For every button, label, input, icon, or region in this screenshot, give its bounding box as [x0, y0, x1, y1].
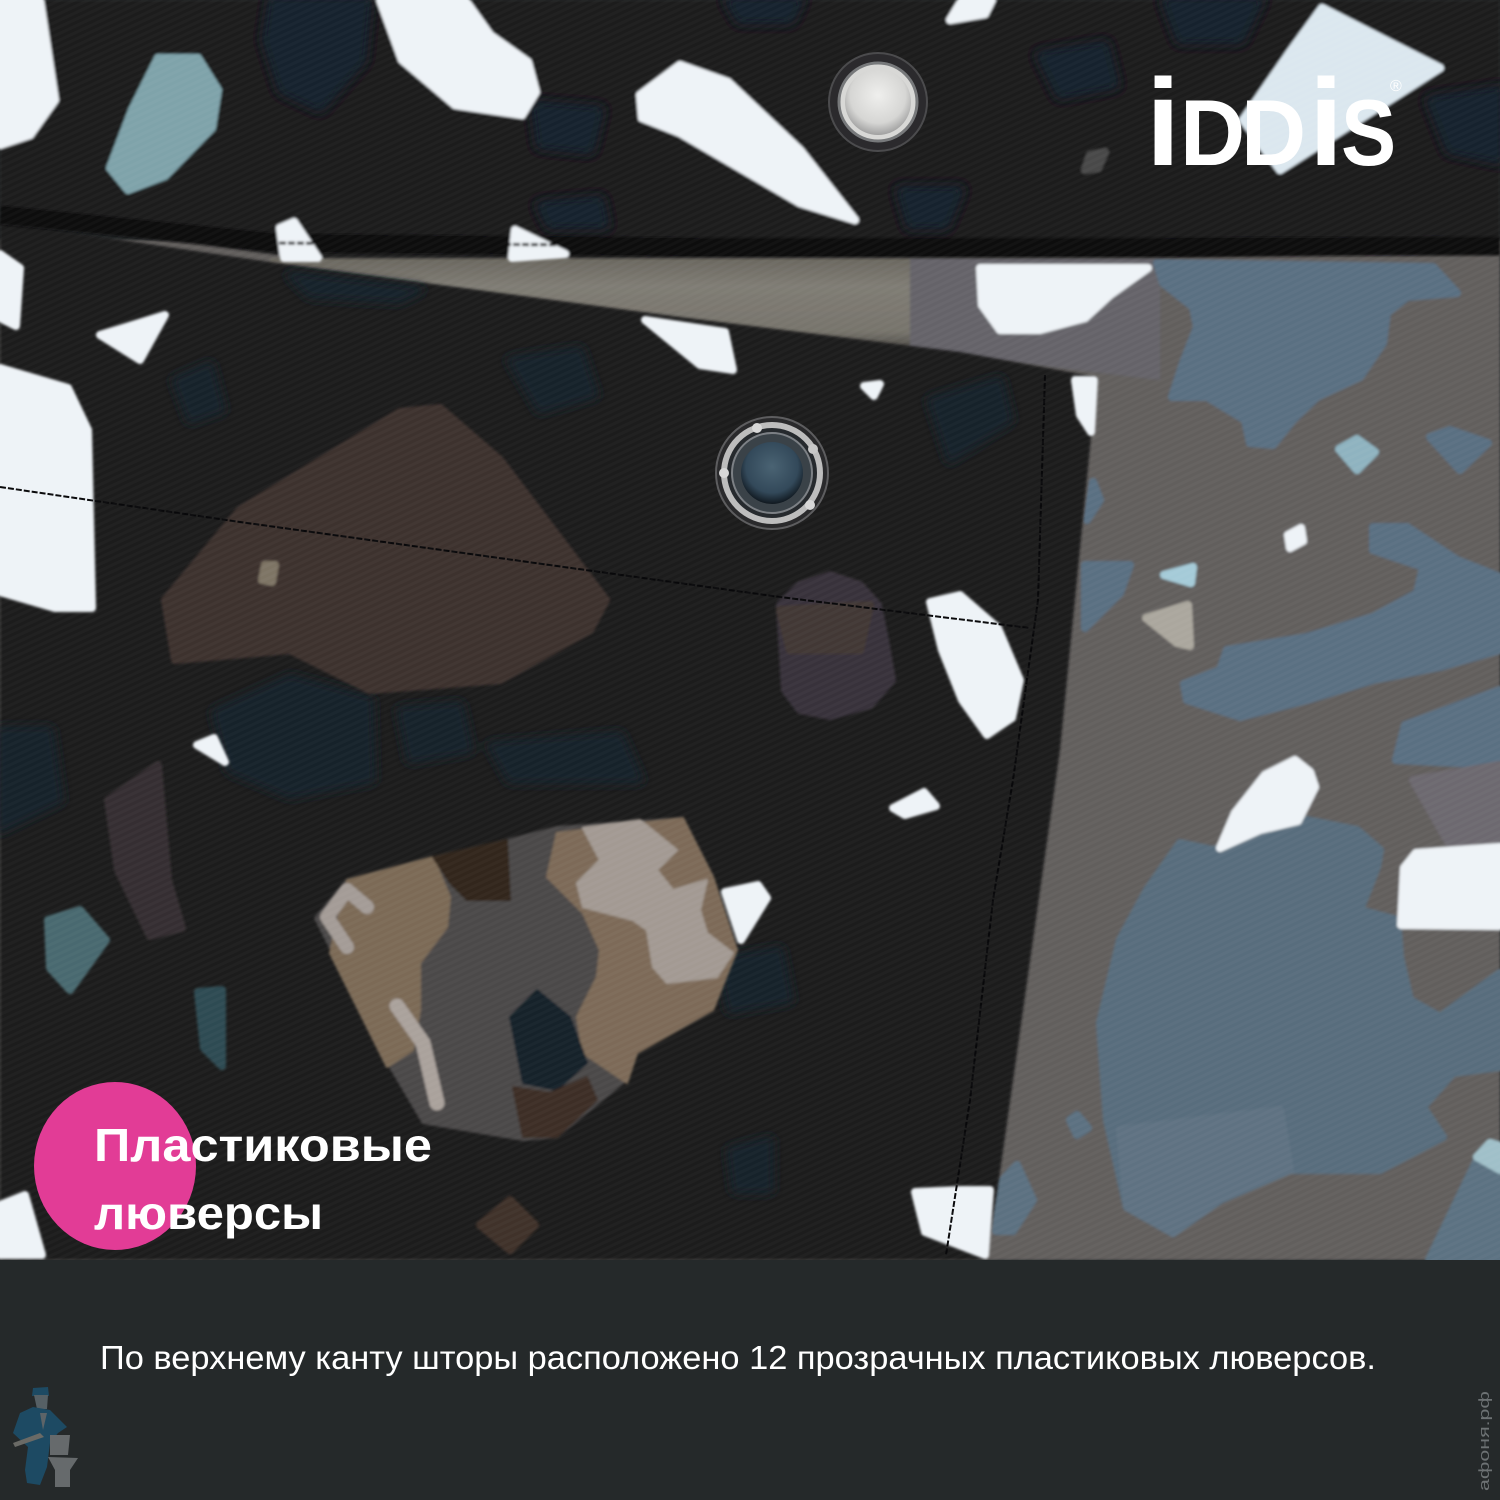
watermark: afonya.rf: афоня.рф	[1476, 1391, 1493, 1491]
white stones	[0, 254, 1094, 1255]
logo: iddis: S	[1341, 80, 1396, 185]
teal stones	[48, 910, 106, 990]
camouflage stone	[315, 818, 737, 1140]
panel: top band	[0, 0, 1500, 258]
grey fold strip	[270, 258, 910, 350]
icon: top grommet	[829, 53, 927, 151]
heading: plastic grommets: Пластиковые	[94, 1119, 432, 1171]
lighter grey patch	[1413, 765, 1500, 845]
flap stitching lines	[0, 487, 1030, 628]
small blue stones	[996, 1165, 1033, 1231]
panel: front curtain flap	[0, 222, 1097, 1260]
icon: transparent plastic grommet	[716, 417, 828, 529]
panel: back curtain fabric	[0, 240, 1500, 1260]
logo: iddis	[1146, 55, 1402, 192]
text block: description: По верхнему канту шторы расположено 12 прозрачных пластиковых люверсов.	[100, 1339, 1376, 1376]
navy terrazzo patches	[0, 275, 1010, 1190]
navy patches	[266, 0, 1500, 225]
panel: bottom caption bar	[0, 1260, 1500, 1500]
grey-brown stone	[780, 575, 892, 716]
teal stone	[110, 58, 218, 190]
left dark-grey stone	[108, 765, 182, 936]
stitch across white stones	[270, 243, 600, 245]
brown pebble	[480, 1200, 535, 1250]
large blue-grey stone	[1100, 820, 1500, 1233]
blue-grey terrazzo patches	[1085, 263, 1500, 765]
icon: plumber watermark	[13, 1387, 78, 1487]
white stones	[980, 268, 1500, 926]
white stones	[0, 0, 992, 258]
decorative pink circle	[34, 1082, 196, 1250]
logo: iddis: i	[1309, 55, 1343, 192]
heading: plastic grommets: люверсы	[94, 1187, 323, 1239]
logo: iddis: D	[1241, 80, 1306, 185]
logo: iddis: ®	[1390, 78, 1402, 95]
heading: plastic grommets	[94, 1119, 432, 1239]
band seam	[0, 215, 1500, 247]
logo: iddis: D	[1180, 80, 1245, 185]
brown stone	[165, 408, 606, 690]
logo: iddis: i	[1146, 55, 1180, 192]
